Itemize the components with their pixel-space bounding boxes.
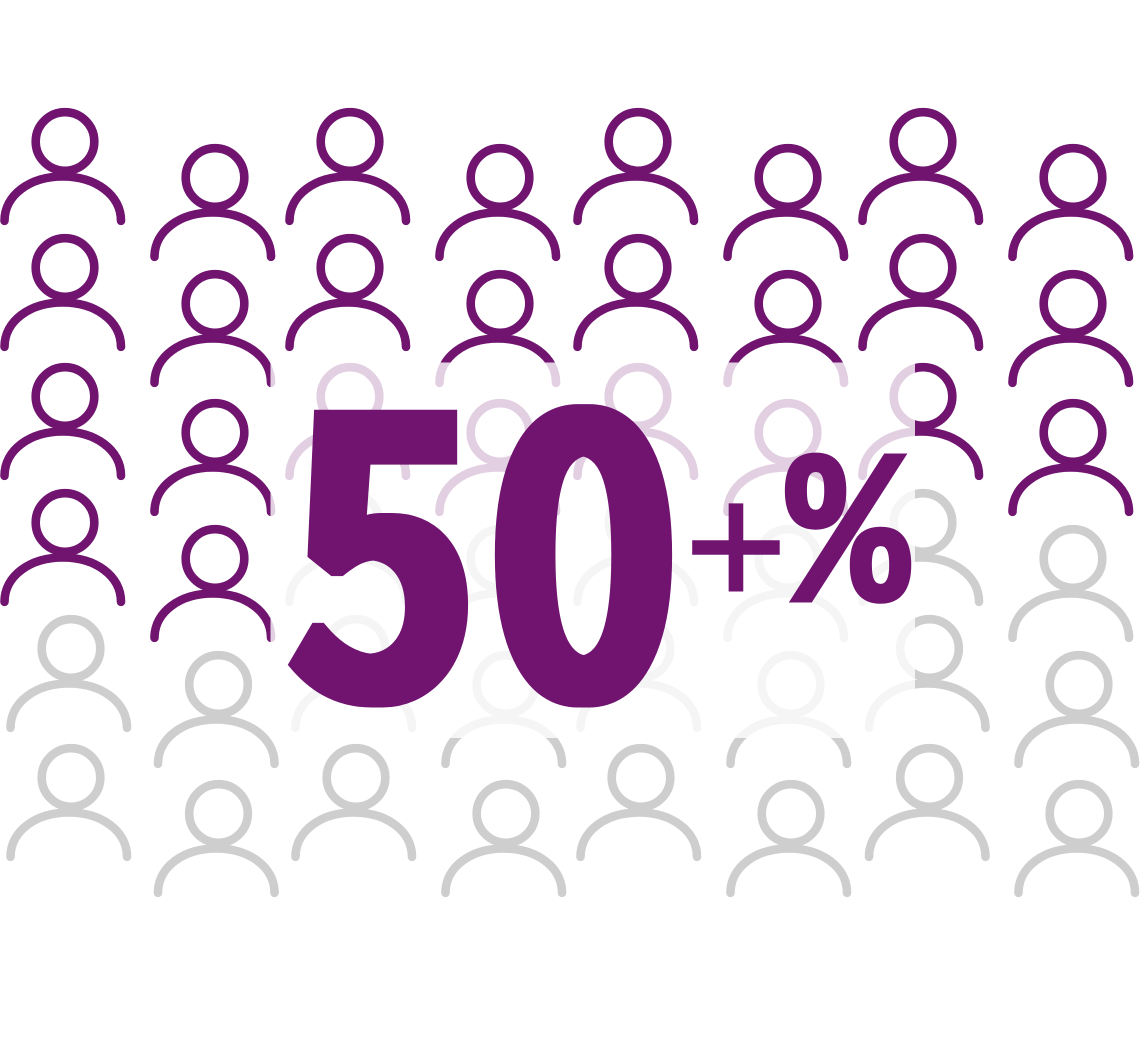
icon: person — [154, 403, 271, 512]
icon: person — [446, 655, 562, 764]
icon: person — [1012, 274, 1129, 383]
icon: person — [578, 367, 694, 476]
icon: person — [290, 112, 406, 221]
icon: person — [1018, 784, 1135, 893]
icon: person — [580, 748, 697, 857]
icon: person — [440, 529, 556, 638]
icon: person — [1012, 403, 1129, 512]
icon: person — [728, 403, 844, 512]
white translucent panel behind the number — [270, 362, 915, 738]
icon: person — [578, 493, 694, 602]
icon: person — [578, 112, 694, 221]
icon: person — [869, 619, 986, 728]
icon: person — [1012, 529, 1129, 638]
icon: person — [440, 403, 556, 512]
icon: person — [10, 748, 127, 857]
icon: person — [862, 367, 979, 476]
icon: person — [290, 493, 406, 602]
icon: person — [290, 367, 406, 476]
icon: person — [862, 238, 979, 347]
icon: person — [158, 784, 274, 893]
icon: person — [440, 274, 556, 383]
icon: person — [728, 274, 844, 383]
icon: person — [4, 367, 121, 476]
icon: person — [862, 112, 979, 221]
icon: person — [728, 148, 844, 257]
icon: person — [730, 784, 847, 893]
icon: person — [1018, 655, 1135, 764]
headline number 50+% — [288, 240, 909, 814]
icon: person — [869, 748, 986, 857]
icon: person — [154, 529, 271, 638]
icon: person — [4, 238, 121, 347]
icon: person — [730, 655, 847, 764]
icon: person — [728, 529, 844, 638]
digit 0: 0 — [489, 240, 678, 814]
plus sign: + — [685, 448, 787, 644]
icon: person — [862, 493, 979, 602]
digit 5: 5 — [288, 240, 478, 814]
icon: person — [158, 655, 274, 764]
icon: person — [290, 238, 406, 347]
icon: person — [578, 238, 694, 347]
icon: person — [440, 148, 556, 257]
icon: person — [446, 784, 562, 893]
icon: person — [296, 619, 412, 728]
icon: person — [580, 619, 697, 728]
icon: person — [1012, 148, 1129, 257]
percent sign: % — [787, 420, 909, 666]
people grid — [4, 112, 1135, 893]
icon: person — [4, 112, 121, 221]
icon: person — [154, 148, 271, 257]
icon: person — [296, 748, 412, 857]
icon: person — [10, 619, 127, 728]
icon: person — [4, 493, 121, 602]
icon: person — [154, 274, 271, 383]
